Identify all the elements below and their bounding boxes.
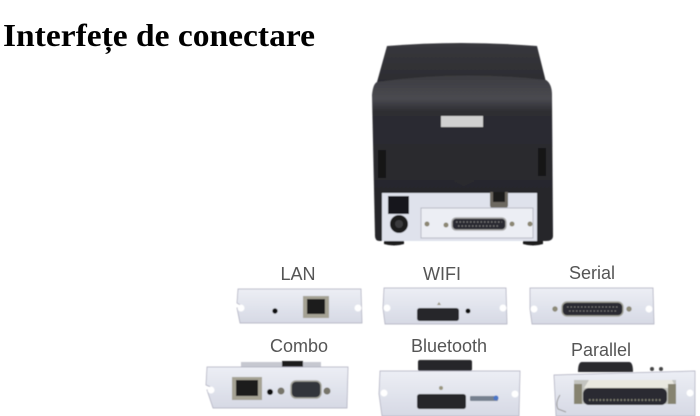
label: Combo: Combo — [270, 336, 328, 356]
printer label — [441, 116, 483, 127]
title: Interfețe de conectare — [3, 18, 315, 54]
label: Bluetooth: Bluetooth — [411, 336, 487, 356]
printer body — [372, 75, 553, 241]
label: WIFI: WIFI — [423, 264, 461, 284]
card: Combo — [206, 361, 348, 408]
round connector — [390, 215, 408, 233]
printer DB25 connector — [452, 218, 506, 230]
printer screws — [424, 222, 430, 226]
card: LAN — [237, 289, 362, 323]
printer upper cover — [377, 43, 546, 82]
printer feet — [384, 240, 543, 246]
printer serial plate — [421, 208, 533, 238]
card: WIFI — [383, 288, 507, 324]
printer back panel — [382, 193, 537, 241]
label: LAN: LAN — [280, 264, 316, 284]
power socket — [388, 196, 409, 214]
label: Serial: Serial — [569, 263, 615, 283]
label: Parallel: Parallel — [571, 340, 631, 360]
hexagon mark — [455, 166, 473, 186]
USB port — [490, 192, 508, 208]
side vents — [378, 148, 546, 178]
card: Serial — [530, 288, 654, 324]
card: Parallel — [554, 362, 695, 416]
card: Bluetooth — [379, 360, 520, 416]
printer rear view — [372, 43, 553, 246]
